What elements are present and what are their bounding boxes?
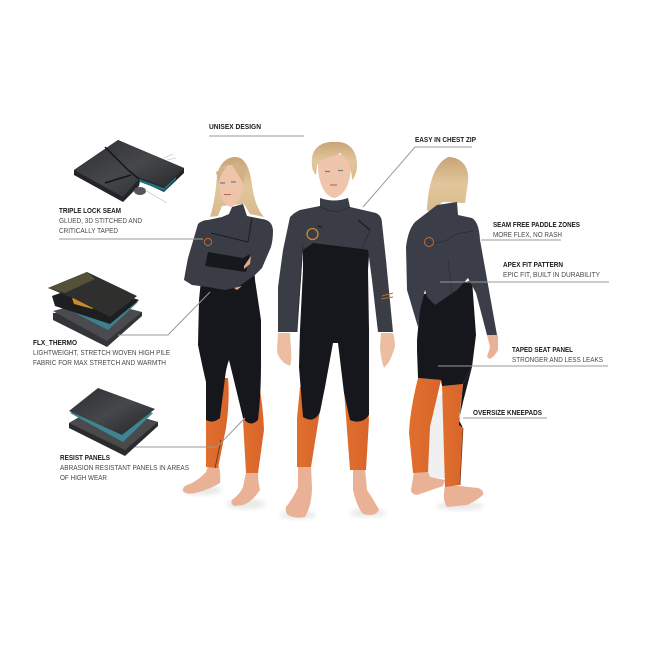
black lower body — [198, 250, 261, 424]
callout: flx_thermo: FABRIC FOR MAX STRETCH AND WARMTH — [33, 358, 166, 367]
charcoal chest and arms — [278, 198, 393, 332]
orange lower legs — [206, 378, 229, 468]
callout: easy in chest zip: EASY IN CHEST ZIP — [415, 135, 476, 144]
callout: seam free paddle zones — [481, 220, 580, 240]
swatch: triple lock seam — [74, 140, 184, 203]
callout: triple lock seam: CRITICALLY TAPED — [59, 226, 118, 235]
swatch: flx_thermo layers — [48, 272, 142, 347]
callout: taped seat panel: STRONGER AND LESS LEAKS — [512, 355, 603, 364]
swatch: resist panel layers — [69, 388, 158, 456]
callout: triple lock seam — [59, 206, 203, 239]
feet — [411, 472, 445, 495]
callout: flx_thermo — [33, 292, 210, 367]
black torso and legs — [299, 240, 370, 422]
callout: flx_thermo: LIGHTWEIGHT, STRETCH WOVEN HIGH PILE — [33, 348, 170, 357]
callout: flx_thermo: FLX_THERMO — [33, 338, 77, 347]
callout: unisex design — [209, 122, 304, 136]
feet — [286, 466, 312, 518]
callout: easy in chest zip — [363, 135, 476, 207]
figure: girl front view — [182, 157, 273, 509]
callout: resist panels: ABRASION RESISTANT PANELS IN AREAS — [60, 463, 189, 472]
left foot — [183, 466, 220, 494]
callout: oversize kneepads: OVERSIZE KNEEPADS — [473, 408, 542, 417]
torso upper and crossed arms — [184, 204, 273, 290]
hair — [427, 157, 468, 212]
callout: triple lock seam: GLUED, 3D STITCHED AND — [59, 216, 142, 225]
hair — [210, 157, 264, 217]
right foot — [231, 472, 260, 506]
charcoal back and arms — [406, 202, 497, 335]
callout: apex fit pattern: APEX FIT PATTERN — [503, 260, 563, 269]
callout: seam free paddle zones: SEAM FREE PADDLE ZONES — [493, 220, 580, 229]
callout: apex fit pattern: EPIC FIT, BUILT IN DURABILITY — [503, 270, 600, 279]
black lower body — [417, 280, 476, 386]
callout: seam free paddle zones: MORE FLEX, NO RASH — [493, 230, 562, 239]
figure: girl back view — [406, 157, 498, 510]
figure: boy front view — [277, 142, 395, 519]
orange lower legs — [297, 387, 323, 467]
callout: apex fit pattern — [440, 260, 609, 282]
callout: resist panels — [60, 418, 245, 482]
callout: unisex design: UNISEX DESIGN — [209, 122, 261, 131]
head — [318, 154, 351, 198]
callout: resist panels: OF HIGH WEAR — [60, 473, 107, 482]
hand — [487, 335, 498, 359]
callout: triple lock seam: TRIPLE LOCK SEAM — [59, 206, 121, 215]
callout: resist panels: RESIST PANELS — [60, 453, 110, 462]
orange legs — [409, 378, 441, 473]
logo — [307, 228, 318, 240]
hair — [312, 142, 357, 180]
callout: taped seat panel: TAPED SEAT PANEL — [512, 345, 573, 354]
face — [219, 165, 243, 207]
hands — [277, 333, 291, 366]
callout: taped seat panel — [438, 345, 608, 366]
